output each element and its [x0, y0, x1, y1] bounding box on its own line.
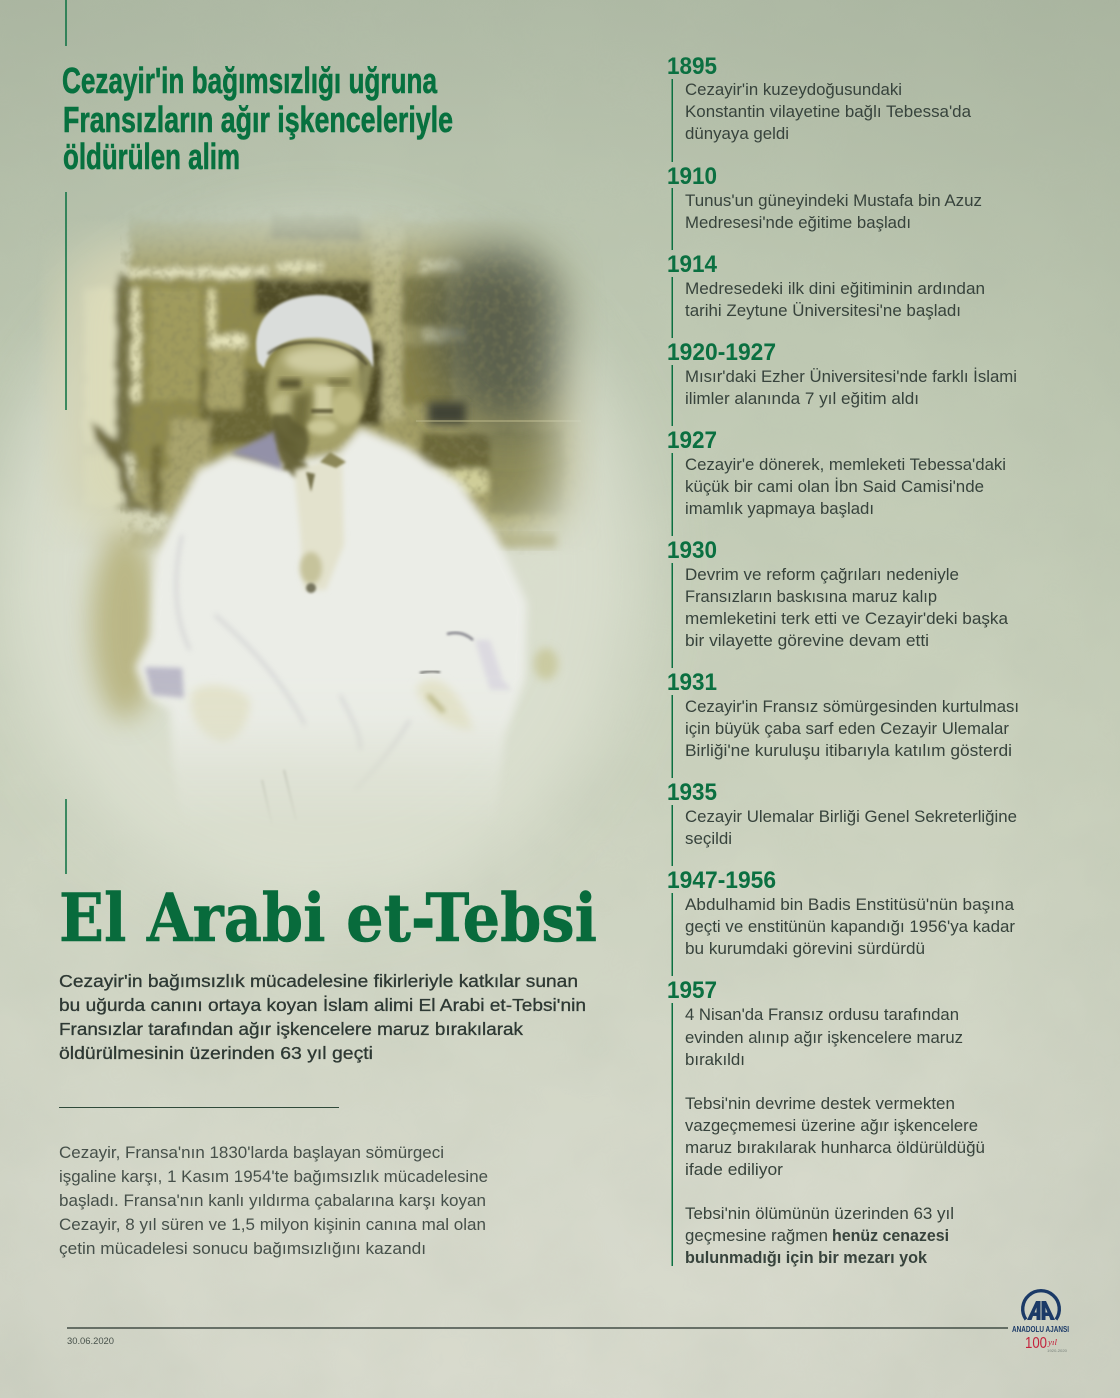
timeline entry 1927: Cezayir'e dönerek, memleketi Tebessa'daki	[685, 456, 1006, 474]
logo wordmark: ANADOLU AJANSI	[1012, 1324, 1069, 1334]
timeline entry 1927: 1927	[667, 427, 717, 454]
timeline entry 1930: Fransızların baskısına maruz kalıp	[685, 588, 937, 606]
main title: El Arabi et-Tebsi	[59, 879, 597, 957]
timeline entry 1957: henüz cenazesi	[832, 1227, 949, 1245]
intro bold paragraph: Cezayir'in bağımsızlık mücadelesine fikirleriyle katkılar sunan	[59, 971, 578, 991]
photo turban	[256, 295, 373, 368]
decorative vertical green lines	[65, 0, 67, 874]
section divider	[59, 1106, 339, 1108]
timeline entry 1957: bırakıldı	[685, 1051, 745, 1069]
timeline entry 1910: Medresesi'nde eğitime başladı	[685, 214, 911, 232]
timeline entry 1930: 1930	[667, 537, 717, 564]
timeline entry 1935: Cezayir Ulemalar Birliği Genel Sekreterliğine	[685, 808, 1017, 826]
footer rule	[67, 1327, 1008, 1329]
timeline entry 1947-1956	[667, 867, 1016, 976]
timeline entry 1927: küçük bir cami olan İbn Said Camisi'nde	[685, 477, 984, 496]
intro bold paragraph: bu uğurda canını ortaya koyan İslam alimi El Arabi et-Tebsi'nin	[59, 995, 586, 1015]
context paragraph: Cezayir, 8 yıl süren ve 1,5 milyon kişinin canına mal olan	[59, 1216, 486, 1234]
context paragraph: işgaline karşı, 1 Kasım 1954'te bağımsızlık mücadelesine	[59, 1168, 488, 1186]
subtitle heading: Fransızların ağır işkenceleriyle	[63, 99, 453, 140]
photo robe	[130, 422, 529, 776]
timeline entry 1914	[667, 251, 985, 338]
timeline entry 1957: maruz bırakılarak hunharca öldürüldüğü	[685, 1139, 985, 1157]
timeline entry 1920-1927: Mısır'daki Ezher Üniversitesi'nde farklı İslami	[685, 367, 1017, 386]
timeline entry 1930: memleketini terk etti ve Cezayir'deki başka	[685, 610, 1009, 628]
timeline entry 1931: 1931	[667, 669, 717, 696]
timeline entry 1931: Birliği'ne kuruluşu itibarıyla katılım gösterdi	[685, 742, 1012, 760]
timeline entry 1931: Cezayir'in Fransız sömürgesinden kurtulması	[685, 698, 1019, 716]
timeline entry 1930	[667, 537, 1009, 668]
timeline entry 1927: imamlık yapmaya başladı	[685, 500, 874, 518]
timeline entry 1935: seçildi	[685, 830, 732, 848]
timeline entry 1947-1956: geçti ve enstitünün kapandığı 1956'ya kadar	[685, 918, 1016, 936]
timeline entry 1957: 1957	[667, 977, 717, 1004]
timeline entry 1914: tarihi Zeytune Üniversitesi'ne başladı	[685, 302, 961, 320]
intro bold paragraph: öldürülmesinin üzerinden 63 yıl geçti	[59, 1043, 373, 1063]
intro bold paragraph: Fransızlar tarafından ağır işkencelere maruz bırakılarak	[59, 1019, 523, 1039]
timeline entry 1930: Devrim ve reform çağrıları nedeniyle	[685, 566, 959, 584]
timeline entry 1895	[667, 53, 972, 162]
logo 100 years badge: 1920-2020	[1047, 1348, 1068, 1353]
timeline entry 1947-1956: bu kurumdaki görevini sürdürdü	[685, 940, 925, 958]
timeline entry 1931	[667, 669, 1019, 778]
timeline entry 1910	[667, 163, 982, 250]
timeline entry 1957: Tebsi'nin ölümünün üzerinden 63 yıl	[685, 1205, 954, 1223]
timeline entry 1920-1927: ilimler alanında 7 yıl eğitim aldı	[685, 390, 919, 408]
timeline entry 1927	[667, 427, 1006, 536]
timeline entry 1957: Tebsi'nin devrime destek vermekten	[685, 1095, 955, 1113]
timeline entry 1935: 1935	[667, 779, 717, 806]
logo 100 years badge: yıl	[1047, 1338, 1058, 1347]
timeline entry 1914: Medresedeki ilk dini eğitiminin ardından	[685, 280, 985, 298]
timeline entry 1947-1956: Abdulhamid bin Badis Enstitüsü'nün başına	[685, 896, 1015, 914]
intro bold paragraph	[59, 971, 586, 1063]
logo 100 years badge: 100	[1025, 1335, 1047, 1352]
timeline entry 1895: Cezayir'in kuzeydoğusundaki	[685, 81, 902, 99]
timeline entry 1957: geçmesine rağmen	[685, 1227, 828, 1245]
timeline entry 1920-1927	[667, 339, 1017, 426]
timeline entry 1910: 1910	[667, 163, 717, 190]
context paragraph: çetin mücadelesi sonucu bağımsızlığını kazandı	[59, 1240, 426, 1258]
timeline	[667, 53, 1019, 1267]
timeline entry 1895: Konstantin vilayetine bağlı Tebessa'da	[685, 103, 972, 121]
date: 30.06.2020	[67, 1336, 114, 1346]
timeline entry 1947-1956: 1947-1956	[667, 867, 776, 894]
photo lower wall patches	[91, 528, 558, 720]
timeline entry 1957: ifade ediliyor	[685, 1161, 784, 1179]
subtitle heading: öldürülen alim	[63, 136, 240, 177]
timeline entry 1930: bir vilayette görevine devam etti	[685, 632, 929, 650]
timeline entry 1935	[667, 779, 1017, 866]
timeline entry 1895: dünyaya geldi	[685, 125, 789, 143]
timeline entry 1957	[667, 977, 985, 1267]
timeline entry 1957: 4 Nisan'da Fransız ordusu tarafından	[685, 1006, 959, 1024]
context paragraph	[59, 1144, 488, 1258]
decorative photo: El Arabi et-Tebsi portrait	[0, 205, 640, 910]
timeline entry 1957: vazgeçmemesi üzerine ağır işkencelere	[685, 1117, 978, 1135]
photo building backdrop	[36, 205, 600, 555]
timeline entry 1910: Tunus'un güneyindeki Mustafa bin Azuz	[685, 192, 982, 210]
logo mark	[1023, 1291, 1059, 1320]
photo cuffs and hands	[145, 633, 512, 742]
photo collar and chest	[230, 430, 346, 593]
context paragraph: Cezayir, Fransa'nın 1830'larda başlayan sömürgeci	[59, 1144, 444, 1162]
timeline entry 1895: 1895	[667, 53, 717, 80]
photo face	[266, 336, 374, 462]
photo pale halo	[0, 230, 640, 910]
timeline entry 1914: 1914	[667, 251, 718, 278]
photo figure	[130, 293, 529, 776]
context paragraph: başladı. Fransa'nın kanlı yıldırma çabalarına karşı koyan	[59, 1192, 486, 1210]
timeline entry 1957: evinden alınıp ağır işkencelere maruz	[685, 1029, 963, 1047]
subtitle heading: Cezayir'in bağımsızlığı uğruna	[62, 60, 438, 101]
timeline entry 1957: bulunmadığı için bir mezarı yok	[685, 1249, 928, 1267]
logo 100 years badge	[1025, 1335, 1068, 1353]
subtitle heading	[62, 60, 453, 177]
Anadolu Ajansi logo	[1012, 1291, 1069, 1353]
timeline entry 1920-1927: 1920-1927	[667, 339, 776, 366]
timeline entry 1931: için büyük çaba sarf eden Cezayir Ulemalar	[685, 720, 1010, 738]
